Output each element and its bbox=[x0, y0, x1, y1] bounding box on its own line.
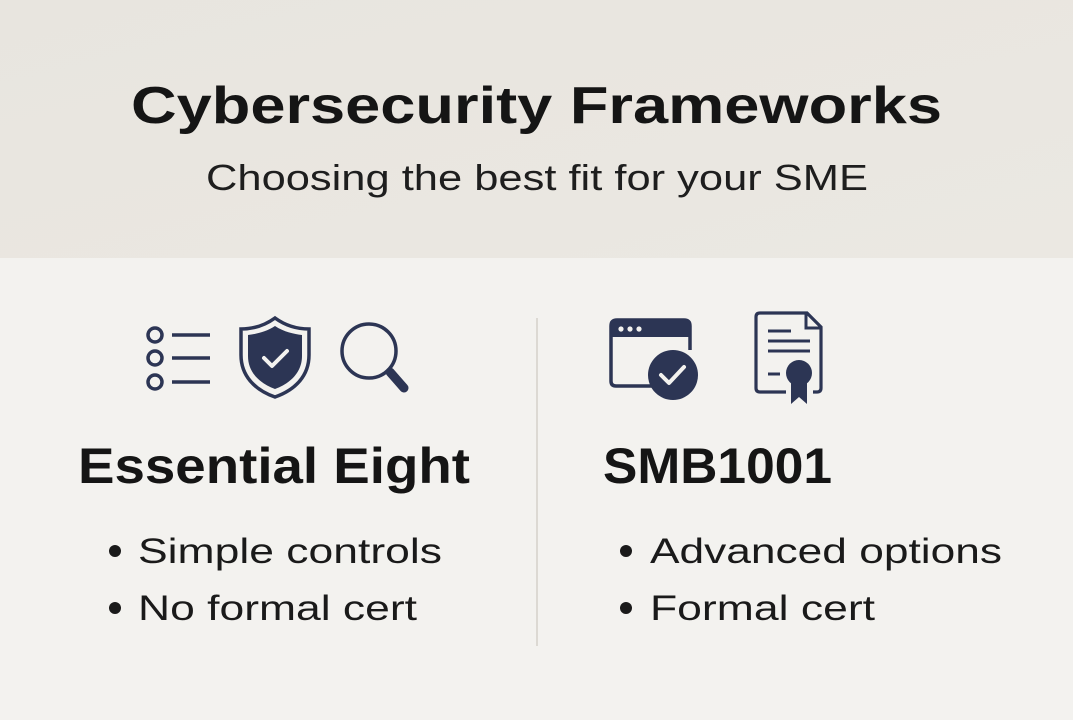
panel: Essential Eight bbox=[78, 318, 470, 628]
icon: magnifier bbox=[342, 324, 404, 388]
panel: SMB1001 bbox=[603, 313, 1002, 628]
bullets: Formal cert bbox=[650, 589, 875, 628]
bullets: Simple controls bbox=[138, 532, 442, 571]
bullets bbox=[620, 532, 1002, 628]
heading: SMB1001: SMB1001 bbox=[603, 438, 832, 494]
header band bbox=[0, 0, 1073, 258]
icon: certificate document bbox=[756, 313, 821, 404]
icon: shield bbox=[241, 318, 309, 397]
title: Cybersecurity Frameworks bbox=[131, 77, 942, 135]
bullets: No formal cert bbox=[138, 589, 417, 628]
icon: checklist bbox=[148, 328, 210, 389]
bullets: Advanced options bbox=[650, 532, 1002, 571]
divider bbox=[536, 318, 538, 646]
icon: browser check bbox=[611, 320, 698, 400]
subtitle: Choosing the best fit for your SME bbox=[206, 157, 868, 198]
heading: Essential Eight: Essential Eight bbox=[78, 438, 470, 494]
bullets bbox=[109, 532, 442, 628]
